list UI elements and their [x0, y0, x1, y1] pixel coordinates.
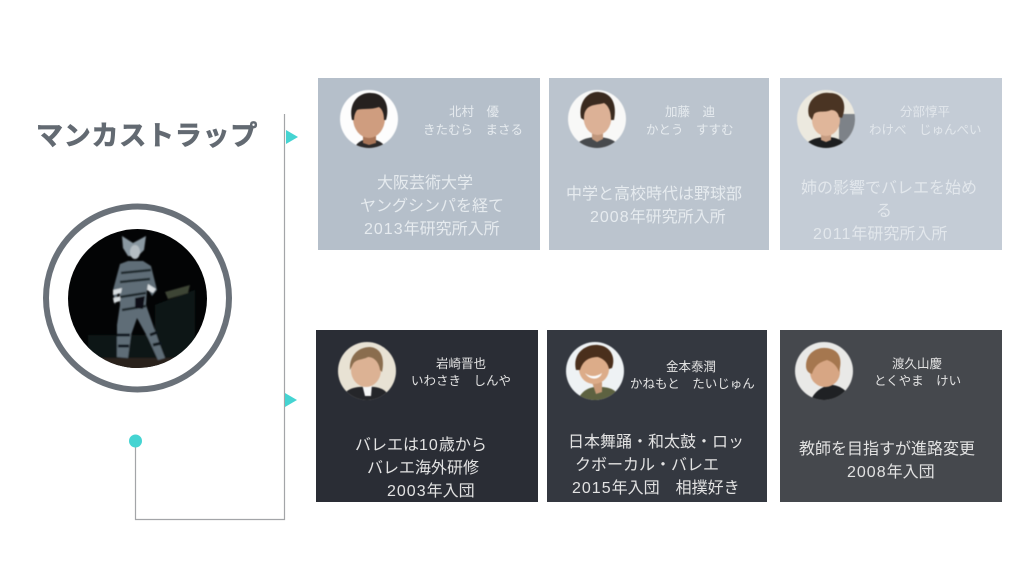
- character ring portrait: [43, 204, 232, 392]
- name text: [869, 105, 982, 136]
- connector line with dot and arrows: [129, 114, 298, 520]
- title: マンカストラップ: [36, 121, 258, 151]
- description text: る: [876, 202, 892, 220]
- icon: portrait 北村: [340, 90, 398, 149]
- description text: 2003年入団: [387, 482, 475, 500]
- description text: 2015年入団 相撲好き: [572, 480, 740, 497]
- panel: 岩崎晋也: [316, 330, 538, 502]
- description text: [799, 440, 975, 481]
- description text: バレエは10歳から: [355, 436, 487, 454]
- description text: 姉の影響でバレエを始め: [801, 180, 977, 196]
- name text: [646, 105, 734, 136]
- description text: 大阪芸術大学: [377, 174, 473, 192]
- icon: portrait 金本: [565, 341, 625, 400]
- name text: とくやま けい: [874, 374, 961, 388]
- description text: バレエ海外研修: [367, 460, 479, 476]
- panel: 渡久山慶: [780, 330, 1002, 502]
- name text: 分部惇平: [900, 105, 950, 119]
- icon: portrait 分部: [796, 90, 856, 149]
- description text: [801, 179, 977, 242]
- name text: いわさき しんや: [411, 374, 511, 388]
- panel: 金本泰潤: [547, 330, 767, 502]
- description text: 教師を目指すが進路変更: [799, 441, 975, 458]
- name text: 金本泰潤: [666, 360, 716, 374]
- description text: [568, 433, 744, 497]
- description text: 中学と高校時代は野球部: [566, 186, 742, 203]
- name text: かとう すすむ: [646, 122, 734, 136]
- name text: [630, 360, 755, 391]
- description text: [360, 174, 504, 238]
- panel: 加藤 迪: [549, 78, 769, 250]
- name text: [423, 105, 523, 136]
- name text: 渡久山慶: [892, 356, 942, 370]
- name text: 岩崎晋也: [436, 356, 486, 370]
- panel: 北村 優: [318, 78, 540, 250]
- name text: かねもと たいじゅん: [630, 377, 755, 391]
- icon: portrait 岩崎: [337, 341, 397, 400]
- name text: [874, 356, 961, 388]
- description text: [566, 185, 742, 226]
- icon: portrait 渡久山: [794, 341, 854, 400]
- name text: 加藤 迪: [665, 105, 715, 119]
- description text: クボーカル・バレエ: [575, 457, 719, 474]
- description text: [355, 436, 487, 500]
- name text: きたむら まさる: [423, 122, 523, 136]
- name text: わけべ じゅんぺい: [869, 122, 982, 136]
- description text: 2008年研究所入所: [590, 209, 726, 226]
- name text: 北村 優: [449, 105, 499, 119]
- description text: 2008年入団: [847, 464, 935, 481]
- description text: 2013年研究所入所: [364, 220, 500, 238]
- description text: 2011年研究所入所: [813, 226, 947, 242]
- description text: ヤングシンパを経て: [360, 198, 504, 214]
- name text: [411, 356, 511, 388]
- icon: portrait 加藤: [568, 90, 626, 149]
- panel: 分部惇平: [780, 78, 1002, 250]
- description text: 日本舞踊・和太鼓・ロッ: [568, 434, 744, 451]
